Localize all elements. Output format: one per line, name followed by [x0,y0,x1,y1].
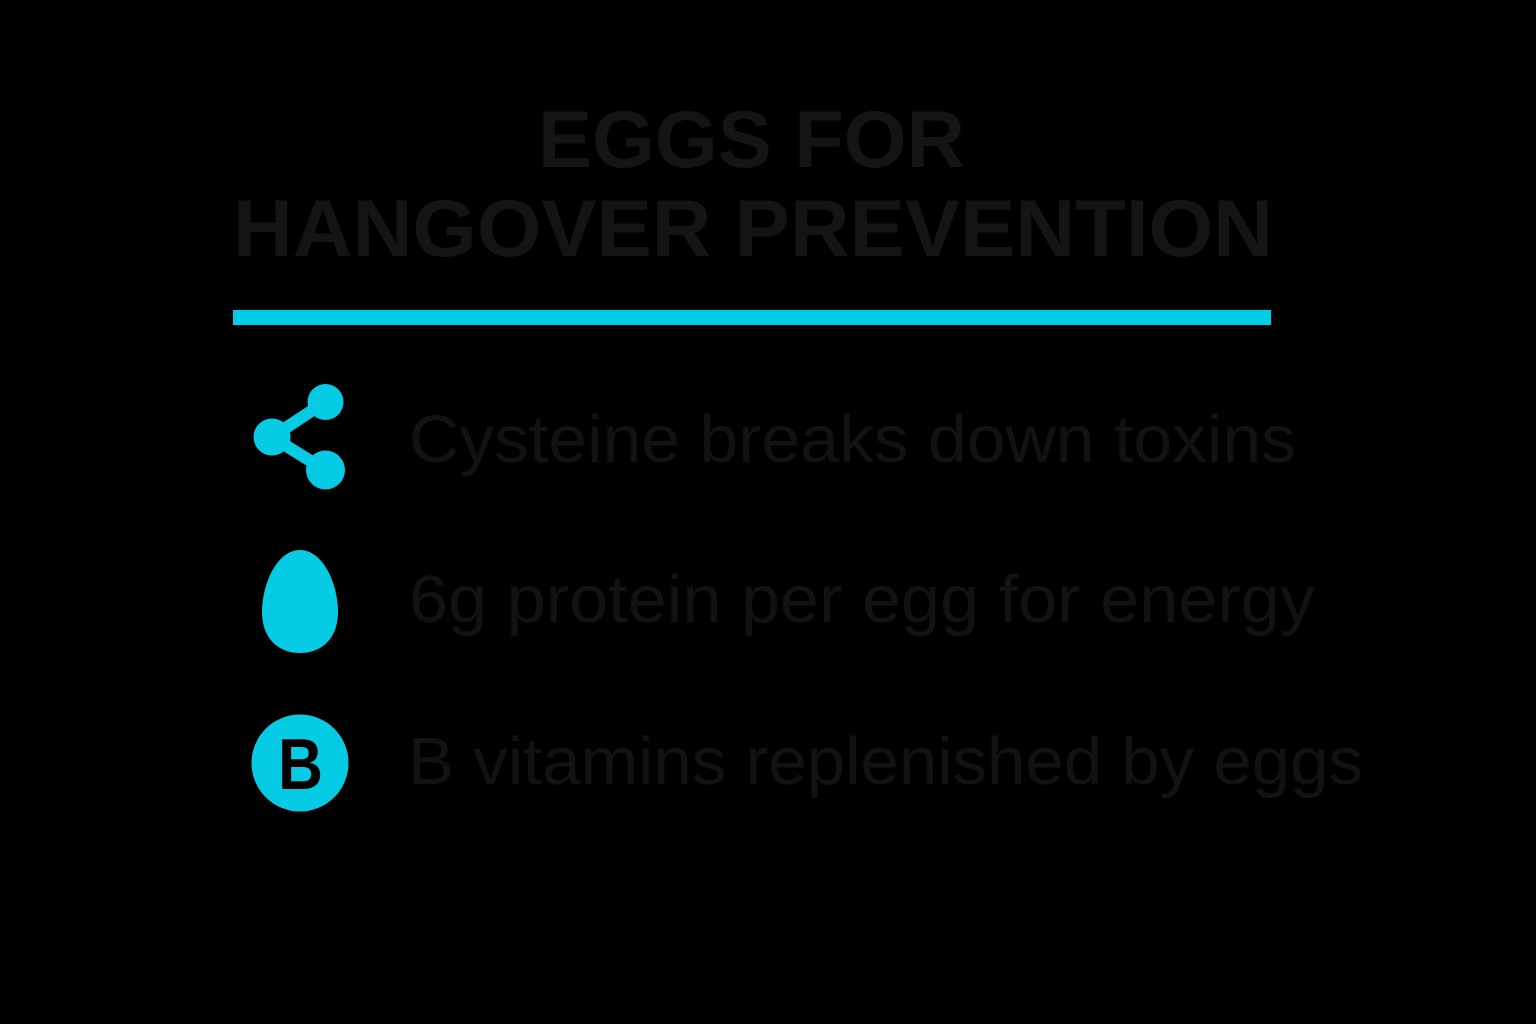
text: B vitamins: B vitamins replenished by eggs [408,724,1363,799]
item: B vitamins [252,714,1363,812]
title line 2: HANGOVER PREVENTION [233,184,1273,274]
item: protein [262,550,1316,653]
icon: vitamin B badge: B [278,725,323,805]
text: protein: 6g protein per egg for energy [409,562,1316,637]
icon: egg [262,550,338,653]
title [233,95,1273,274]
icon: vitamin B badge [252,714,348,812]
icon: molecule [254,384,345,490]
title underline [233,310,1271,325]
text: cysteine: Cysteine breaks down toxins [409,402,1296,477]
item: cysteine [254,384,1296,490]
title line 1: EGGS FOR [538,95,965,185]
